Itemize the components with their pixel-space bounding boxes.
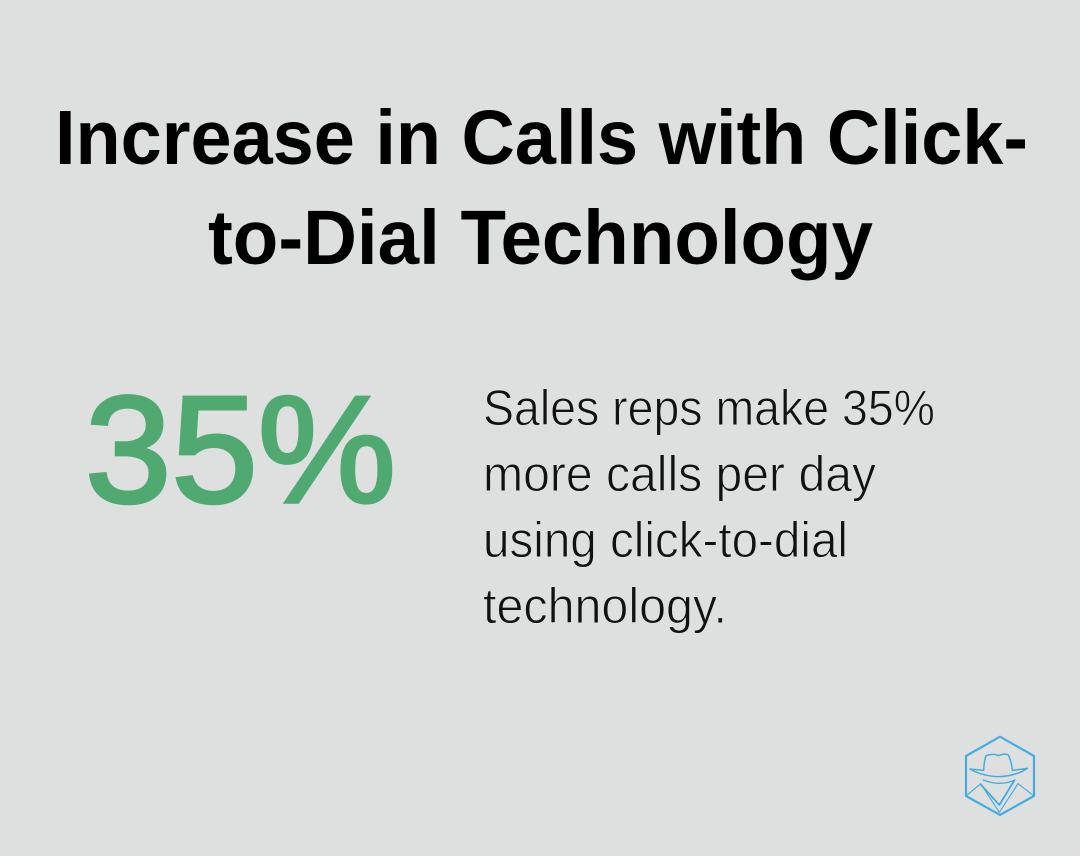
icon: hexagon spy logo [966,737,1034,815]
title: to-Dial Technology [208,195,873,281]
title [55,95,1028,281]
description text [483,380,935,634]
description text: more calls per day [483,446,876,502]
title: Increase in Calls with Click- [55,95,1028,181]
description text: Sales reps make 35% [483,380,935,436]
description text: technology. [483,578,727,634]
description text: using click-to-dial [483,512,848,568]
big statistic: 35%: 35% [85,365,396,535]
